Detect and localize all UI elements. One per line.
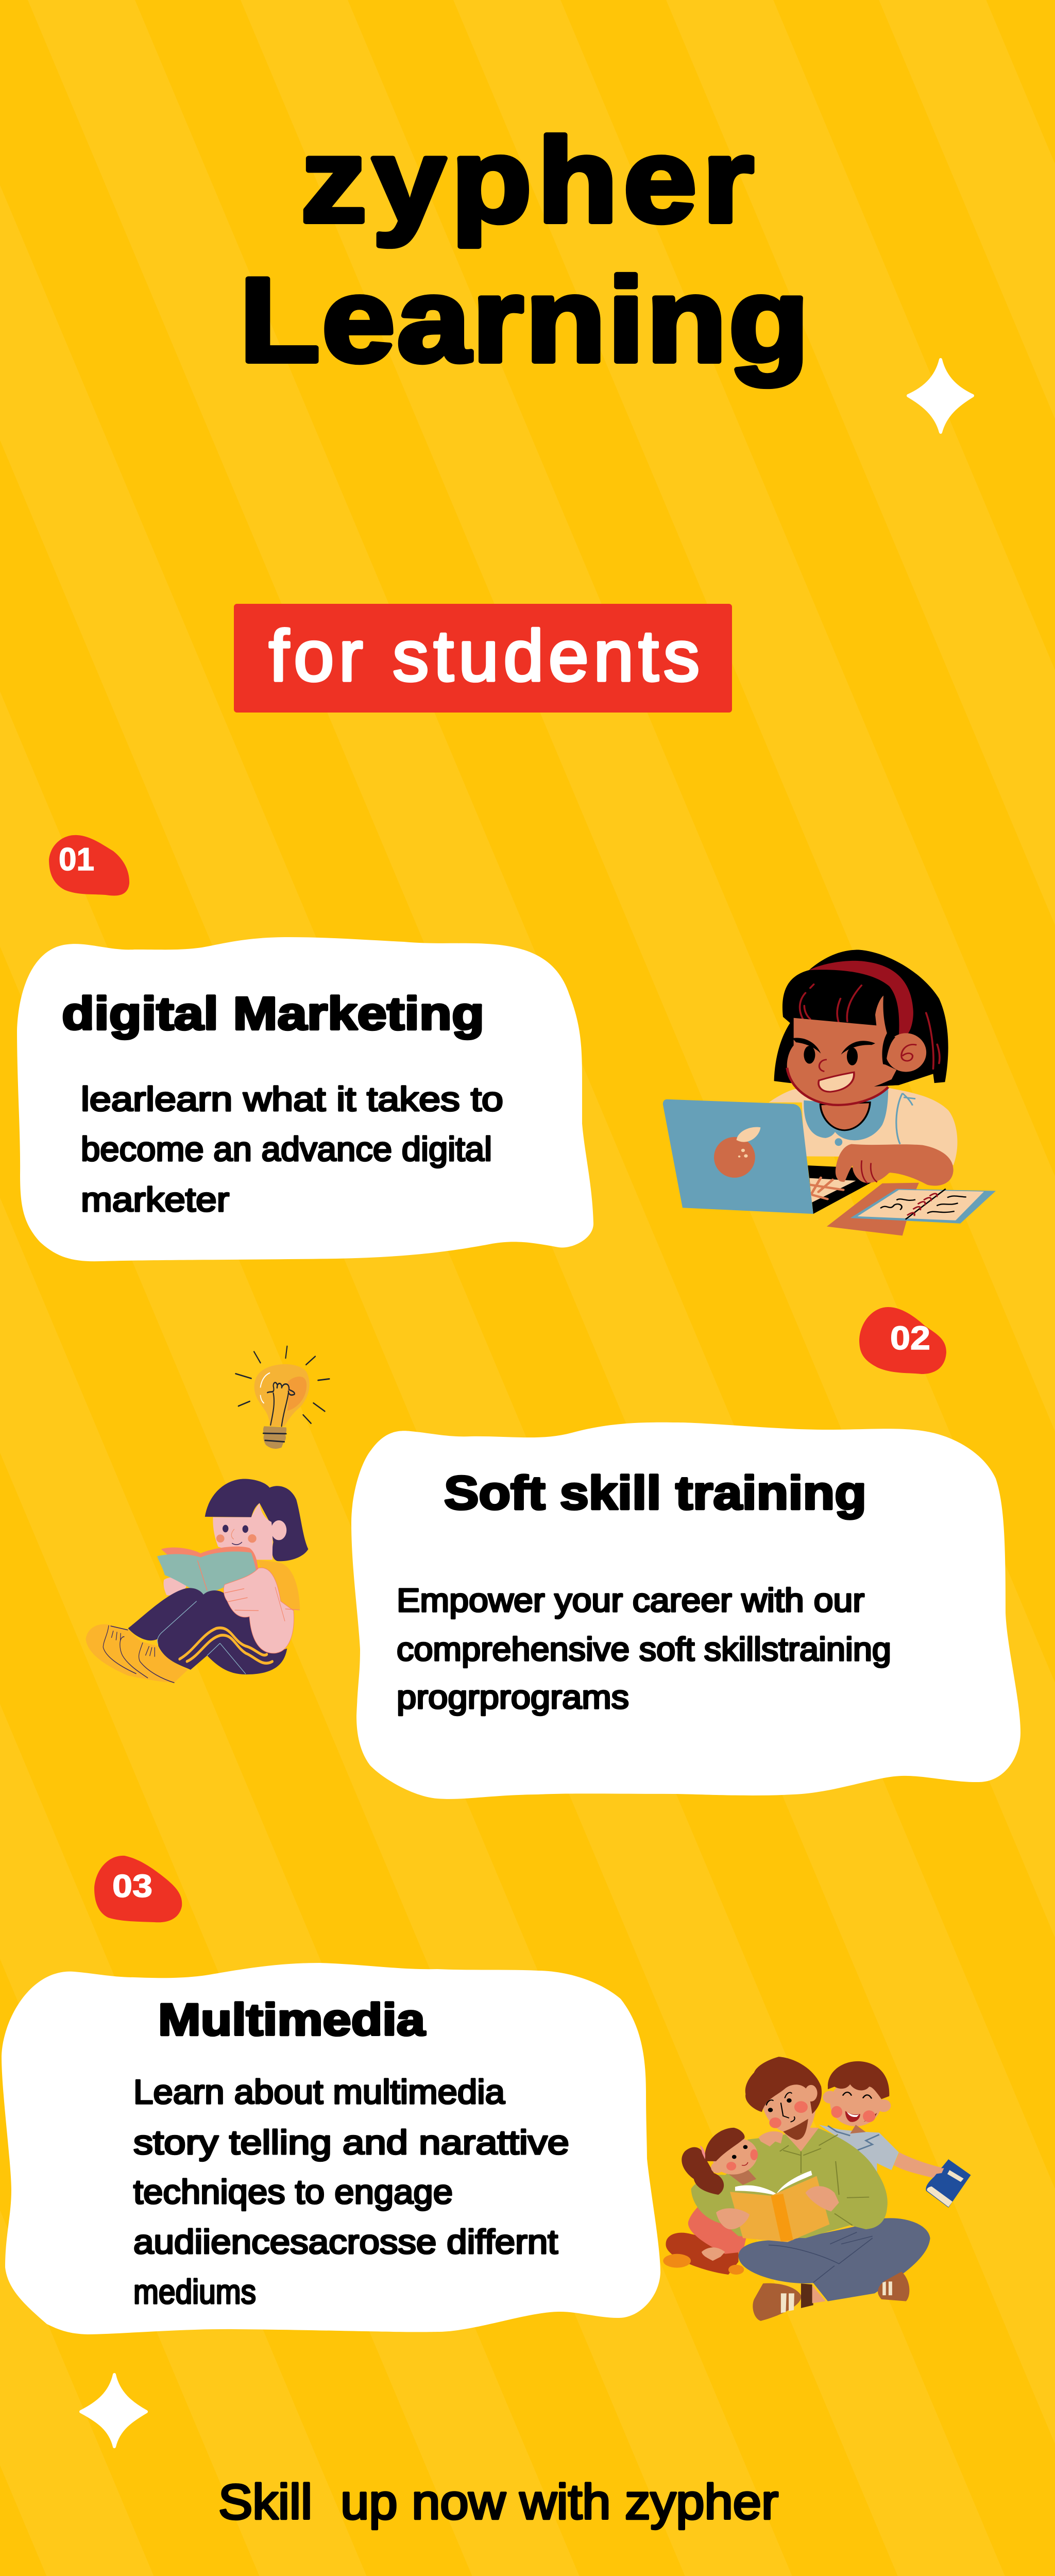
laptop lid [663, 1099, 813, 1214]
illustration: light bulb [235, 1346, 329, 1449]
title [240, 113, 809, 386]
text: multimedia body: audiiencesacrosse differnt [133, 2223, 558, 2261]
panel: multimedia [2, 1963, 660, 2334]
bulb base [263, 1426, 286, 1449]
girl shirt [688, 2179, 759, 2254]
icon: sparkle top [908, 360, 973, 432]
heading: digital marketing: digital Marketing [62, 988, 484, 1040]
shoes [753, 2272, 909, 2321]
boy shirt [819, 2125, 899, 2173]
text: multimedia body [133, 2073, 569, 2311]
text: multimedia body: Learn about multimedia [133, 2073, 505, 2111]
boy arm [894, 2153, 944, 2179]
headband [809, 961, 913, 1035]
book [730, 2171, 829, 2242]
neck [821, 1103, 870, 1130]
nose [819, 1060, 827, 1072]
pants [128, 1588, 287, 1674]
eyes and brows [792, 1038, 875, 1065]
shirt [769, 1088, 957, 1165]
eyes and cheeks [216, 1525, 257, 1545]
badge 01 [49, 835, 129, 895]
illustration: girl reading [86, 1479, 308, 1683]
footer tagline: Skill up now with zypher [218, 2475, 778, 2530]
girl hand [702, 2247, 725, 2261]
mouth [819, 1072, 854, 1092]
badge 02 [859, 1307, 946, 1374]
text: digital marketing body: become an advance digital [81, 1130, 492, 1168]
text: multimedia body: mediums [133, 2273, 256, 2311]
girl head [682, 2128, 764, 2195]
sleeve seam [896, 1093, 915, 1144]
arm [836, 1144, 954, 1186]
hand left [163, 1578, 187, 1596]
badge 01: 01 [59, 842, 94, 877]
text: soft skill body: progrprograms [397, 1679, 629, 1716]
hair [774, 950, 948, 1086]
badge 03 [94, 1856, 182, 1922]
apple logo [714, 1127, 760, 1178]
text: soft skill body: Empower your career with our [397, 1582, 864, 1619]
bulb shade [287, 1377, 307, 1411]
boy head [823, 2061, 891, 2133]
jeans [738, 2218, 930, 2301]
girl pants [666, 2233, 738, 2275]
icon: sparkle bottom [81, 2375, 146, 2447]
collar [804, 1088, 888, 1140]
dad shirt [691, 2128, 888, 2238]
hair [205, 1479, 308, 1561]
hair front [874, 1033, 899, 1087]
book [157, 1547, 258, 1595]
shirt [257, 1560, 300, 1609]
illustration: family reading [663, 2057, 971, 2321]
boy hand [759, 2131, 783, 2146]
notebook [827, 1183, 996, 1235]
shoes [86, 1624, 188, 1683]
subtitle banner [234, 604, 732, 713]
pants stripe [179, 1628, 273, 1663]
subtitle banner: for students [269, 615, 700, 696]
text: multimedia body: story telling and narattive [133, 2123, 569, 2161]
badge 02: 02 [890, 1319, 930, 1357]
blue book [926, 2159, 971, 2208]
ear [886, 1033, 926, 1072]
text: digital marketing body: learlearn what it takes to [81, 1080, 503, 1118]
bulb glass [254, 1364, 310, 1426]
face [213, 1503, 273, 1560]
panel: digital marketing [17, 937, 593, 1261]
text: multimedia body: techniqes to engage [133, 2173, 453, 2211]
arm [224, 1568, 294, 1653]
dad hands [716, 2186, 839, 2229]
dad head [745, 2057, 822, 2151]
text: digital marketing body [81, 1080, 503, 1218]
text: soft skill body [397, 1582, 891, 1716]
hair strands [800, 985, 940, 1069]
illustration: girl with laptop [663, 950, 996, 1235]
filament and rays [235, 1346, 329, 1442]
panel: soft skill training [351, 1422, 1020, 1799]
badge 03: 03 [112, 1869, 152, 1904]
text: soft skill body: comprehensive soft skillstraining [397, 1631, 891, 1668]
heading: soft skill training: Soft skill training [444, 1467, 866, 1519]
title: zypher [301, 113, 754, 247]
keyboard [808, 1165, 895, 1214]
heading: multimedia: Multimedia [158, 1995, 426, 2045]
title: Learning [240, 253, 809, 386]
text: digital marketing body: marketer [81, 1180, 229, 1218]
face [787, 995, 896, 1105]
